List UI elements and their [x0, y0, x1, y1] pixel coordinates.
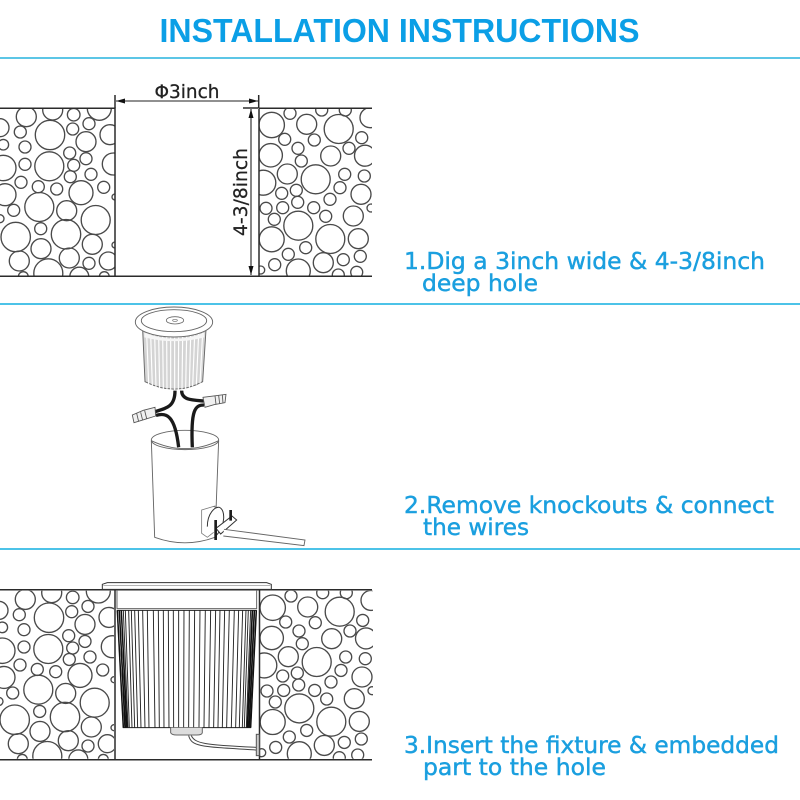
- divider between step 2 and 3: [0, 548, 800, 550]
- step 1 text: [404, 249, 765, 297]
- conduit clamp: [202, 506, 237, 540]
- diagram: step 1 dig hole: [0, 81, 380, 288]
- finned body: [117, 610, 256, 728]
- collar: [117, 590, 257, 609]
- step 2 text: 2.Remove knockouts & connect: [404, 493, 774, 519]
- step 2 text: [404, 493, 774, 541]
- dimension: width: [116, 81, 258, 104]
- dimension: depth: [230, 109, 254, 275]
- dimension: depth: 4-3/8inch: [230, 148, 252, 236]
- soil texture right: [252, 587, 381, 766]
- cable: [189, 736, 257, 750]
- cable entry: [256, 734, 259, 756]
- step 1 text: deep hole: [422, 271, 538, 297]
- step 3 text: part to the hole: [423, 755, 606, 781]
- bottom cap: [171, 728, 202, 735]
- step 3 text: 3.Insert the fixture & embedded: [404, 733, 779, 759]
- black wires: [155, 391, 204, 447]
- sleeve front rim redraw: [151, 441, 219, 449]
- fixture: [102, 583, 271, 756]
- divider between step 1 and 2: [0, 303, 800, 305]
- title: INSTALLATION INSTRUCTIONS: [160, 12, 640, 49]
- soil texture right: [251, 104, 380, 283]
- embedded sleeve: [151, 430, 219, 543]
- step 3 text: [404, 733, 779, 781]
- diagram: step 3 fixture in hole: [0, 579, 381, 770]
- dimension: width: Φ3inch: [154, 81, 220, 103]
- divider under title: [0, 57, 800, 59]
- ground and hole outlines: [0, 95, 372, 276]
- diagram: step 2 fixture and wiring: [132, 307, 305, 546]
- ground and hole outlines: [0, 590, 372, 760]
- step 1 text: 1.Dig a 3inch wide & 4-3/8inch: [404, 249, 765, 275]
- fixture body with fins: [135, 307, 213, 390]
- soil texture left: [0, 579, 123, 770]
- flange: [102, 583, 271, 589]
- conduit pipe: [223, 529, 305, 546]
- wire connectors: [132, 394, 226, 423]
- step 2 text: the wires: [423, 515, 529, 541]
- soil texture left: [0, 96, 124, 288]
